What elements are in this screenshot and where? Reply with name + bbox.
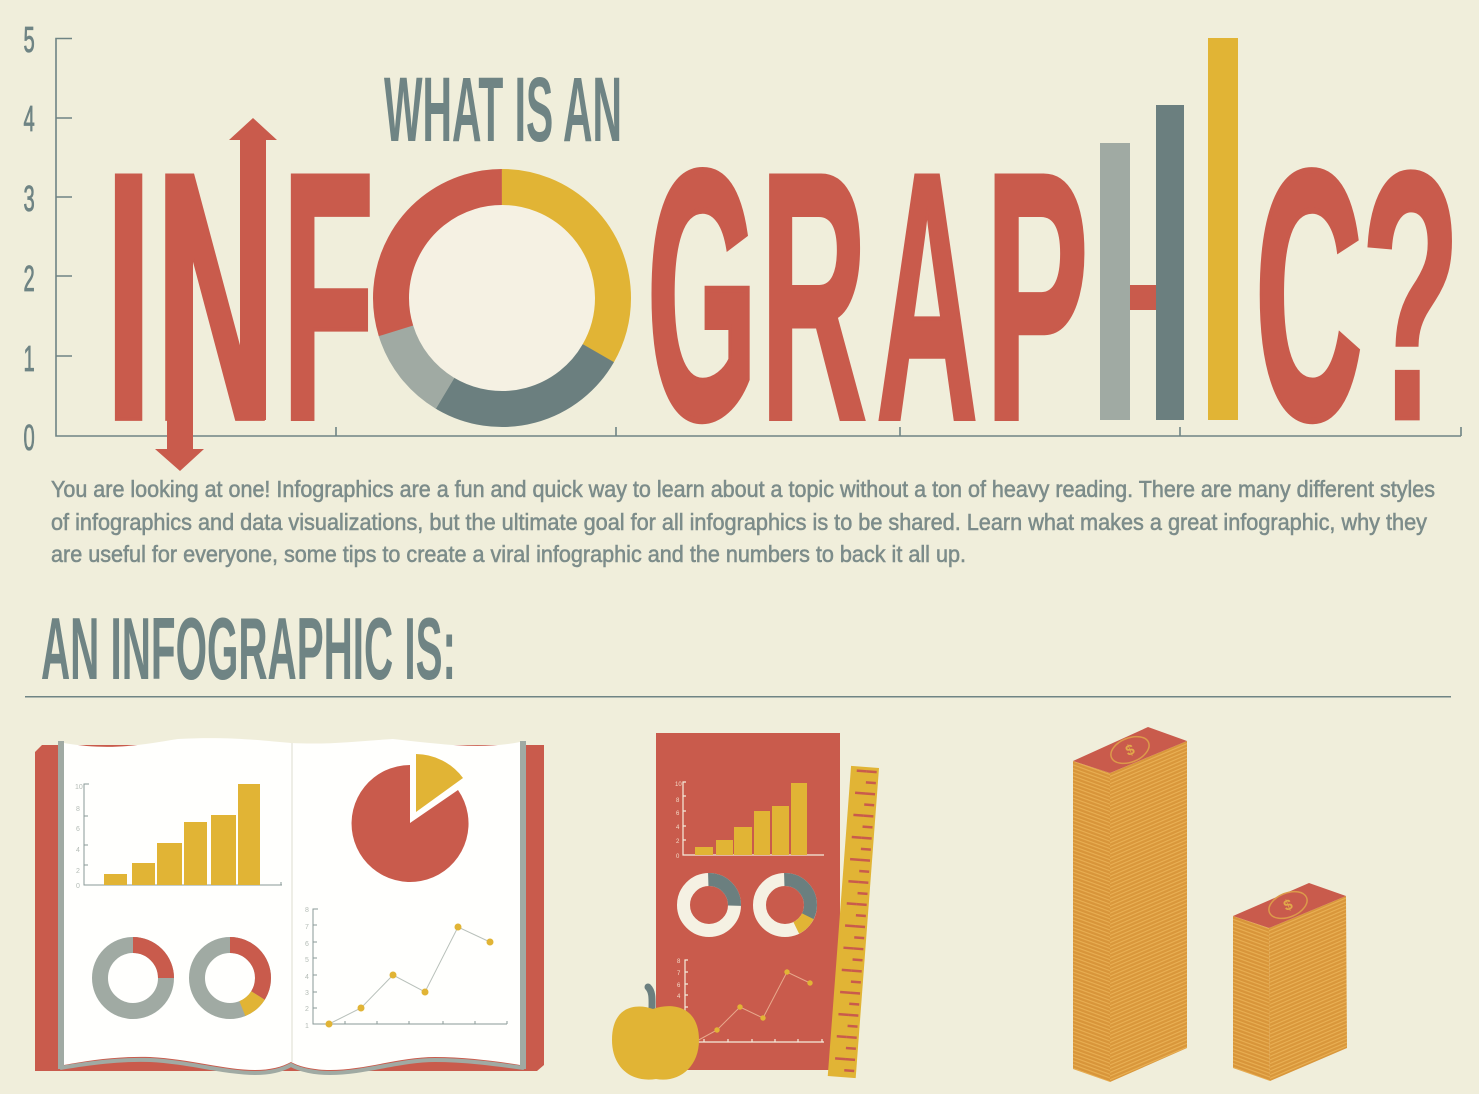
text: WHAT IS AN: [384, 59, 622, 161]
stack right face: [1269, 896, 1347, 1081]
donut chart 2: [185, 933, 275, 1023]
chart axes framing the title: 4: [24, 100, 35, 140]
stack left face: [1233, 916, 1270, 1081]
letter N with arrows: N: [155, 99, 275, 495]
donut chart 2: [751, 871, 819, 939]
letter F: F: [282, 98, 374, 494]
bar chart: 0: [76, 883, 80, 890]
intro paragraph: [51, 476, 1435, 567]
bar chart: 4: [76, 847, 80, 854]
chart axes framing the title: 0: [24, 419, 35, 459]
icon: ruler: [828, 766, 879, 1078]
illustration: red book with apple and ruler: [612, 733, 879, 1080]
bar chart: 8: [676, 798, 680, 804]
line chart: 7: [677, 971, 681, 977]
bar chart: 0: [676, 854, 680, 860]
top banknote: $: [1281, 896, 1296, 915]
letter I: I: [104, 100, 153, 495]
chart axes framing the title: [24, 21, 1461, 459]
bar chart letter I: [1208, 38, 1238, 420]
text: AN INFOGRAPHIC IS:: [41, 599, 456, 698]
letters C and question mark: C: [1255, 97, 1362, 493]
letters GRAP: A: [876, 100, 978, 495]
bar chart: 10: [675, 782, 682, 788]
letters C and question mark: [1255, 97, 1460, 494]
line chart: 5: [305, 957, 309, 964]
icon: apple: [612, 987, 699, 1080]
line chart: 1: [305, 1023, 309, 1030]
intro paragraph: of infographics and data visualizations, but the ultimate goal for all infographics is to be shared. Learn what makes a great infographic, why they: [51, 509, 1427, 535]
illustration: tall money stack: [1073, 727, 1187, 1082]
stack left face: [1073, 761, 1110, 1082]
bar chart: 6: [76, 826, 80, 833]
page edges: [58, 741, 526, 1073]
letters C and question mark: ?: [1361, 100, 1460, 494]
section divider: [25, 696, 1451, 698]
letters GRAP: R: [760, 98, 867, 495]
illustration: short money stack: [1233, 883, 1347, 1081]
letters GRAP: [647, 98, 1089, 495]
pie chart: [352, 754, 469, 882]
line chart: 8: [305, 907, 309, 914]
bar chart: 2: [676, 839, 680, 845]
line chart: 8: [677, 959, 681, 965]
bar chart: 10: [75, 784, 83, 791]
bar chart: 2: [76, 868, 80, 875]
intro paragraph: are useful for everyone, some tips to create a viral infographic and the numbers to back it all up.: [51, 541, 966, 567]
red book cover: [656, 733, 840, 1070]
line chart: 7: [305, 924, 309, 931]
line chart: 2: [305, 1006, 309, 1013]
spine: [291, 743, 293, 1062]
top banknote: [1073, 727, 1187, 773]
bar chart: [675, 782, 824, 860]
line chart: 4: [305, 974, 309, 981]
chart axes framing the title: 3: [24, 180, 35, 220]
donut chart 1: [684, 880, 734, 930]
donut chart 1: [100, 945, 166, 1011]
book pages: [64, 738, 520, 1070]
bar chart: 6: [676, 811, 680, 817]
stack right face: [1110, 741, 1187, 1082]
line chart: 4: [677, 994, 681, 1000]
donut chart letter O: [350, 146, 654, 450]
bar chart: 8: [76, 806, 80, 813]
illustration: open book: [35, 738, 544, 1073]
line chart: 6: [677, 983, 681, 989]
letters GRAP: G: [647, 98, 757, 494]
bar chart: [75, 784, 282, 890]
book cover: [35, 745, 544, 1071]
chart axes framing the title: 5: [24, 21, 35, 61]
bar chart: 4: [676, 825, 680, 831]
letters GRAP: P: [985, 98, 1089, 494]
bar chart letter H: [1100, 105, 1184, 420]
line chart: [677, 959, 824, 1042]
chart axes framing the title: 1: [24, 340, 35, 380]
line chart: 3: [305, 990, 309, 997]
line chart: 6: [305, 941, 309, 948]
title: infographic with chart letters: [104, 38, 1460, 495]
chart axes framing the title: 2: [24, 260, 35, 300]
top banknote: $: [1123, 741, 1138, 760]
line chart: [305, 907, 507, 1030]
top banknote: [1233, 883, 1346, 928]
